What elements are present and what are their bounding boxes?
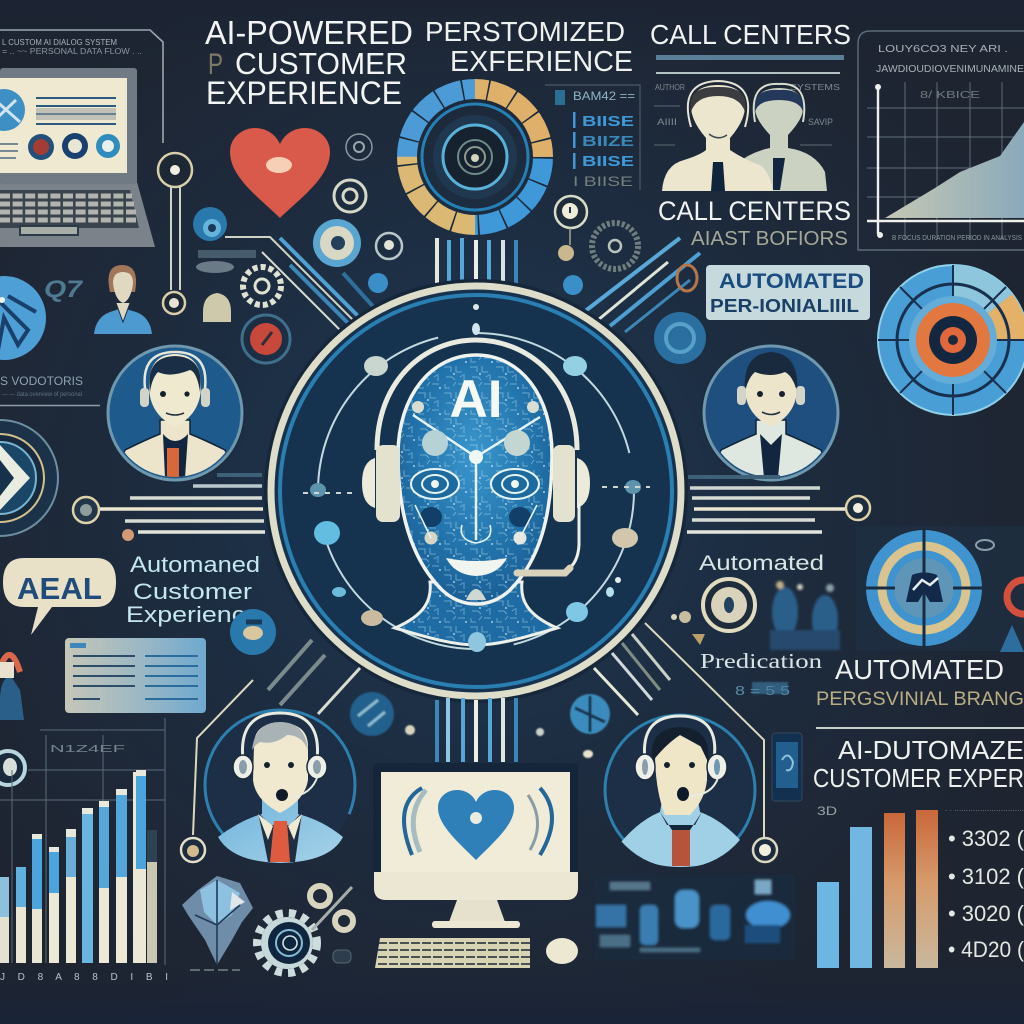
microphone bbox=[517, 503, 579, 573]
left bottom cluster bbox=[0, 655, 25, 785]
panel: call center agents: AUTHOR bbox=[655, 83, 685, 92]
bar chart: right: . . .............................. bbox=[945, 807, 1024, 813]
ear cups bbox=[362, 445, 590, 522]
speech bubble bbox=[3, 558, 116, 635]
icon: crystal bbox=[182, 876, 253, 970]
icon: ring badge bbox=[671, 579, 755, 645]
icon: blue circle bbox=[230, 609, 276, 655]
subheading: call centers: AIAST BOFIORS bbox=[691, 228, 848, 250]
box: automated personalization: PER-IONIALIIIL bbox=[710, 296, 859, 316]
box: automated personalization: AUTOMATED bbox=[719, 270, 864, 293]
panel: laptop: L CUSTOM AI DIALOG SYSTEM bbox=[2, 38, 117, 47]
connector lines: bottom left bbox=[181, 640, 360, 862]
icon: blue heart bbox=[438, 790, 514, 860]
title: AI-powered customer experience: AI-POWERED bbox=[205, 14, 413, 51]
data table bbox=[545, 85, 640, 190]
blurred crowd bbox=[770, 581, 840, 650]
text: automated customer experience: Experience bbox=[126, 602, 260, 627]
stat number: Q7 bbox=[44, 276, 84, 303]
subheading: call centers bbox=[658, 196, 851, 250]
connector lines: left bbox=[73, 475, 265, 541]
connector lines: top bbox=[437, 238, 516, 287]
agent: bottom left bbox=[205, 710, 355, 863]
left globe icon bbox=[0, 276, 46, 360]
text: automated customer experience: Customer bbox=[133, 579, 252, 604]
face bbox=[398, 355, 552, 604]
text: prediction bbox=[700, 649, 823, 698]
line chart panel: LOUY6CO3 NEY ARI . bbox=[878, 44, 1008, 55]
agent: back bbox=[735, 84, 827, 191]
connector lines: bottom right bbox=[594, 623, 777, 862]
keyboard bbox=[375, 938, 530, 968]
heading: personalized experience: EXFERIENCE bbox=[450, 46, 633, 78]
connector lines: right bbox=[687, 477, 870, 532]
data table: BIISE bbox=[582, 113, 634, 130]
box: automated personalization bbox=[706, 265, 870, 320]
panel: laptop: = .. ~~ PERSONAL DATA FLOW . .. bbox=[2, 47, 142, 56]
panel: call center agents: AIIII bbox=[657, 117, 677, 127]
small icons: top right of ring bbox=[555, 196, 706, 364]
left caption block bbox=[0, 374, 100, 406]
connector lines: upper right bbox=[584, 238, 700, 332]
panel: call center agents bbox=[654, 81, 840, 191]
speech bubble: AEAL bbox=[17, 571, 102, 606]
target chart bbox=[878, 265, 1024, 415]
bar chart: left bbox=[0, 718, 168, 983]
neck bbox=[395, 582, 557, 645]
agent: bottom right bbox=[605, 715, 755, 867]
text: automated customer experience bbox=[126, 552, 260, 627]
value list: • 3302 ( bbox=[948, 826, 1024, 851]
agent: right middle bbox=[701, 343, 841, 490]
text: prediction: Predication bbox=[700, 649, 823, 673]
line chart panel: JAWDIOUDIOVENIMUNAMINE bbox=[876, 64, 1024, 75]
monitor bbox=[373, 763, 578, 928]
heading: automated personal bbox=[816, 654, 1024, 710]
connector lines: bottom bbox=[437, 698, 516, 762]
blurred icon cluster: bottom right bbox=[595, 875, 795, 960]
connector lines: upper left bbox=[225, 237, 378, 335]
data table: BIIZE bbox=[582, 133, 634, 150]
text: prediction: 8 = 5 5 bbox=[735, 683, 790, 698]
data table: BAM42 == bbox=[573, 89, 635, 103]
ring nodes bbox=[303, 304, 650, 626]
bars bbox=[0, 770, 157, 963]
bar chart: left: J D 8 A 8 8 D I B I bbox=[0, 972, 168, 983]
heading: personalized experience: PERSTOMIZED bbox=[425, 16, 625, 47]
left ring icon bbox=[0, 420, 58, 536]
left caption block: — — data overview of personal bbox=[2, 392, 82, 398]
heading: AI automated customer experience bbox=[813, 728, 1024, 793]
target icon: blue and gold bbox=[856, 526, 1024, 652]
donut chart bbox=[407, 89, 543, 225]
text: automated customer experience: Automaned bbox=[130, 552, 260, 577]
icon: woman agent bbox=[94, 265, 152, 334]
line chart panel: 8/ KBICE bbox=[920, 90, 980, 101]
bar chart: left: N1Z4EF bbox=[50, 744, 125, 755]
face features bbox=[411, 401, 540, 600]
heading: call centers: CALL CENTERS bbox=[650, 19, 851, 50]
bar chart: right: 3D bbox=[817, 804, 837, 818]
data table: BIISE bbox=[582, 153, 634, 170]
value list bbox=[948, 826, 1024, 962]
title: AI-powered customer experience: P bbox=[208, 48, 223, 81]
icon cluster below ring bbox=[350, 692, 610, 758]
title: AI-powered customer experience bbox=[205, 14, 413, 111]
icon: gear with percent bbox=[257, 886, 353, 973]
title: AI-powered customer experience: EXPERIENCE bbox=[206, 75, 402, 111]
panel: laptop bbox=[0, 30, 163, 247]
text: automated: Automated bbox=[699, 552, 824, 575]
agent: left middle bbox=[105, 343, 245, 490]
left caption block: S VODOTORIS bbox=[0, 374, 83, 388]
connector: left rings bbox=[158, 153, 192, 314]
title: AI-powered customer experience: CUSTOMER bbox=[235, 46, 407, 81]
heading: call centers bbox=[650, 19, 851, 74]
heading: personalized experience bbox=[425, 16, 633, 78]
heading: AI automated customer experience: AI-DUTOMAZE bbox=[838, 735, 1024, 765]
value list: • 3102 ( bbox=[948, 864, 1024, 889]
panel: call center agents: SYSTEMS bbox=[790, 83, 840, 92]
value list: • 3020 ( bbox=[948, 901, 1024, 926]
bar chart: right bbox=[817, 804, 1024, 968]
AI label: AI bbox=[450, 370, 502, 429]
icon: red heart bbox=[230, 128, 330, 218]
small circular icons bbox=[193, 134, 402, 363]
heading: automated personal: AUTOMATED bbox=[835, 654, 1004, 685]
line chart panel bbox=[858, 31, 1024, 250]
info card bbox=[65, 638, 206, 713]
central ring bbox=[264, 279, 688, 703]
icon: mouse bbox=[546, 938, 578, 964]
panel: call center agents: SAVIP bbox=[808, 117, 833, 127]
icon: phone bbox=[772, 733, 802, 801]
heading: automated personal: PERGSVINIAL BRANG bbox=[816, 689, 1024, 710]
subheading: call centers: CALL CENTERS bbox=[658, 196, 851, 226]
sound waves bbox=[404, 788, 552, 855]
data table: I BIISE bbox=[573, 173, 633, 189]
AI head with headset bbox=[362, 340, 590, 652]
agent: front bbox=[662, 81, 773, 191]
